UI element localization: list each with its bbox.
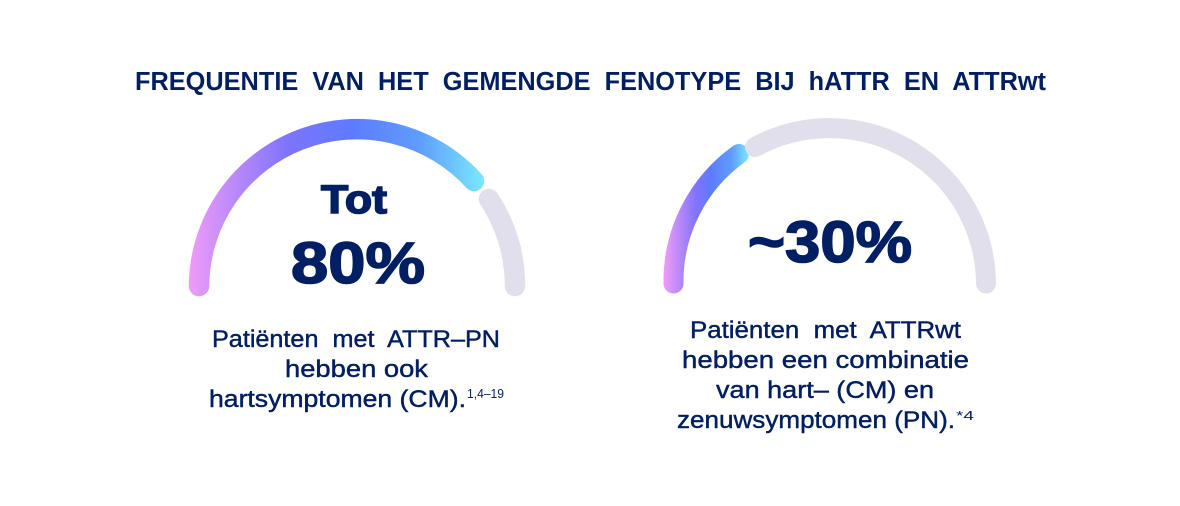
description: ATTRwt: van hart– (CM) en xyxy=(716,377,934,404)
value: ~30%: ~30% xyxy=(748,210,912,275)
label: Tot: Tot xyxy=(321,178,387,222)
description: ATTR-PN: Patiënten met ATTR–PN xyxy=(212,326,500,353)
description: ATTRwt: Patiënten met ATTRwt xyxy=(690,317,961,344)
description: ATTR-PN xyxy=(209,326,504,413)
description: ATTR-PN: 1,4–19 xyxy=(467,386,504,401)
gauge: 30 percent xyxy=(673,128,986,284)
title: FREQUENTIE VAN HET GEMENGDE FENOTYPE BIJ hATTR EN ATTRwt xyxy=(135,68,1047,96)
panel: ATTRwt gauge and text xyxy=(673,128,986,434)
gauge: 80 percent xyxy=(199,129,515,286)
panel: hATTR gauge and text xyxy=(199,129,515,413)
description: ATTR-PN: hartsymptomen (CM). xyxy=(209,386,466,413)
description: ATTRwt: hebben een combinatie xyxy=(682,347,969,374)
description: ATTR-PN: hebben ook xyxy=(285,356,429,383)
description: ATTRwt: *4 xyxy=(956,408,974,423)
description: ATTRwt xyxy=(677,317,974,434)
value: 80%: 80% xyxy=(291,231,425,296)
description: ATTRwt: zenuwsymptomen (PN). xyxy=(677,407,955,434)
